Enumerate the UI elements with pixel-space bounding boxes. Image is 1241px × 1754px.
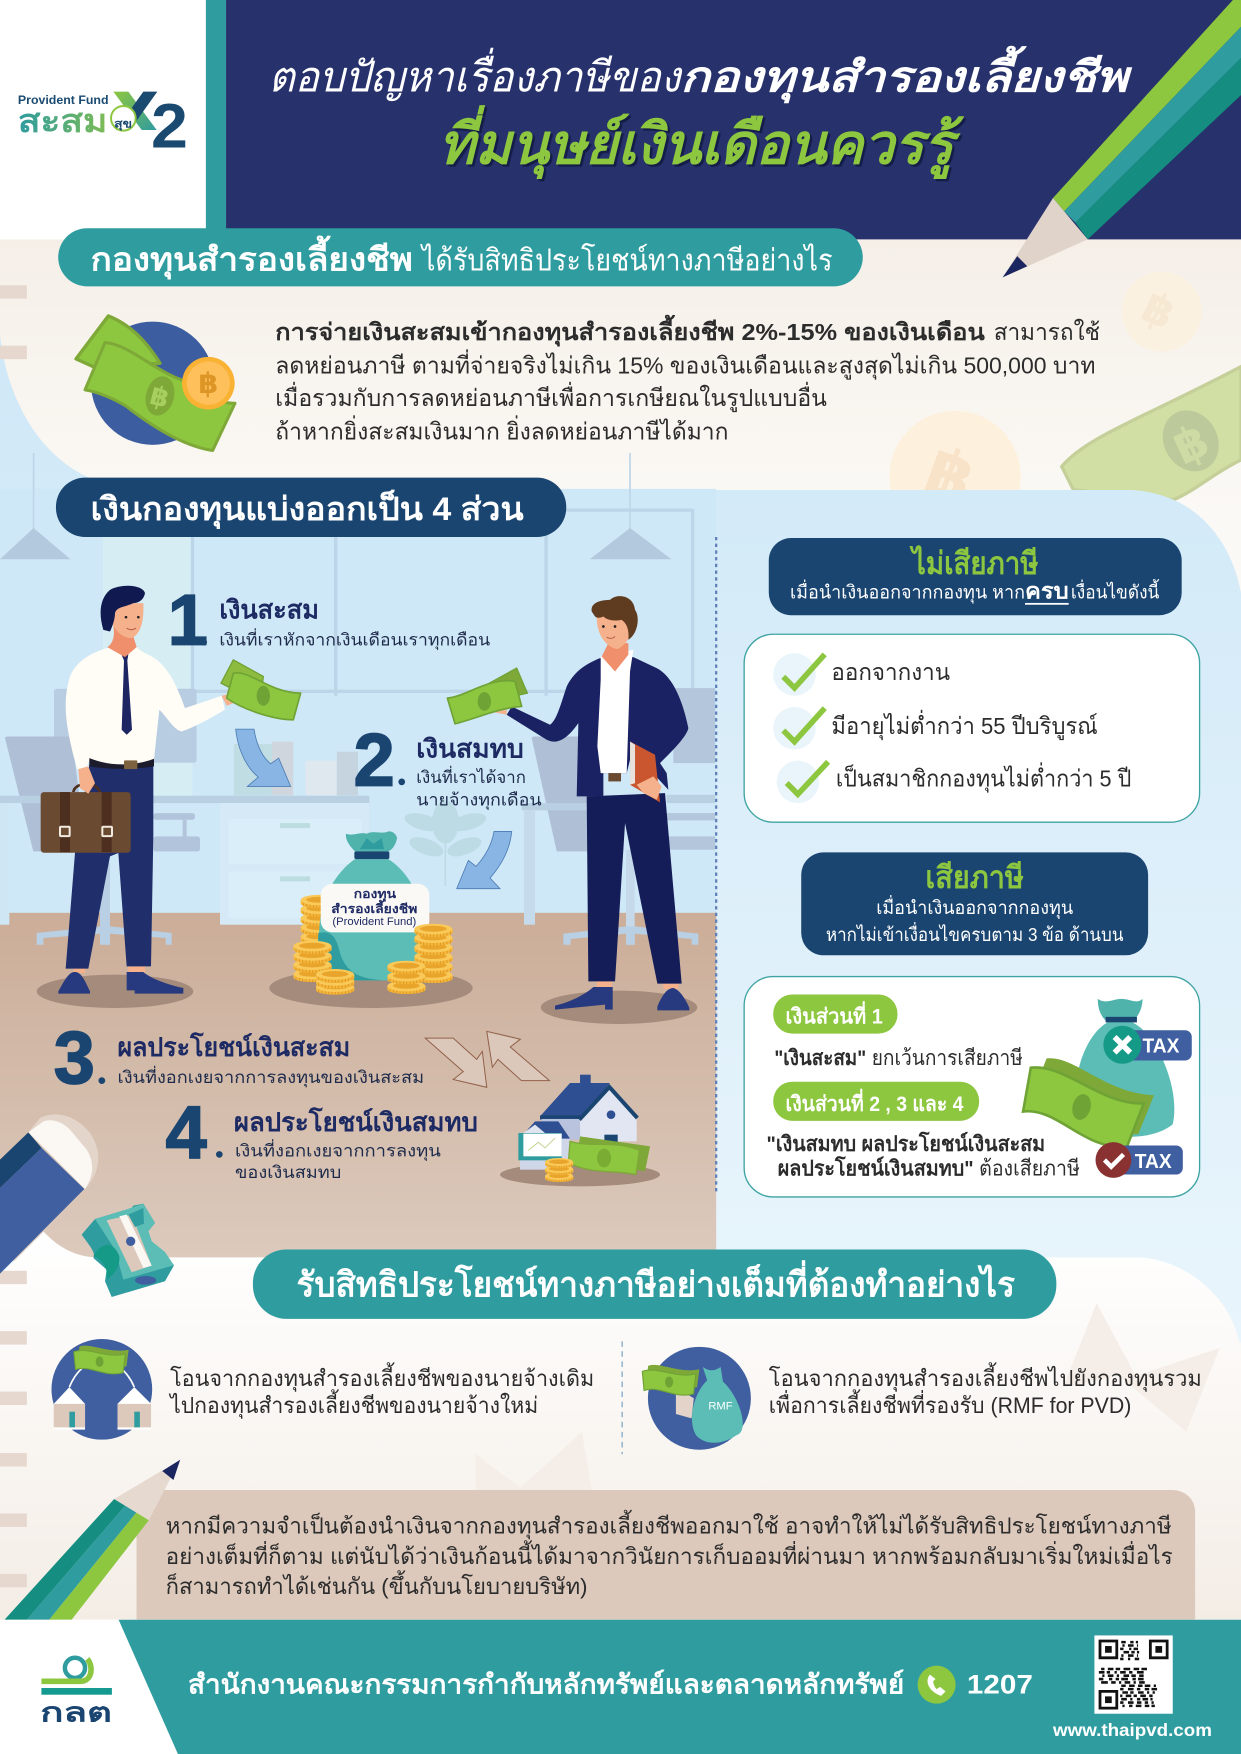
title: ที่มนุษย์เงินเดือนควรรู้ [439, 104, 964, 179]
check 2 [773, 707, 825, 749]
icon: money bag with coins: (Provident Fund) [332, 916, 417, 928]
panel: note: อย่างเต็มที่ก็ตาม แต่นับได้ว่าเงินก้อนนี้ได้มาจากวินัยการเก็บออมที่ผ่านมา หากพร้อมกลับมาเริ่มใหม่เมื่อไร [166, 1540, 1173, 1569]
icon: pencil bottom left [4, 1460, 180, 1620]
check 1 [773, 653, 825, 696]
text block: transfer to new employer: ไปกองทุนสำรองเลี้ยงชีพของนายจ้างใหม่ [168, 1389, 538, 1419]
item 3: savings returns: 3 [54, 1016, 95, 1099]
background: faded coins and bill [889, 272, 1241, 542]
dotted divider [715, 537, 717, 1195]
logo: SEC: กลต [40, 1698, 112, 1728]
footer: hotline: 1207 [967, 1670, 1033, 1700]
footer: office name: สำนักงานคณะกรรมการกำกับหลักทรัพย์และตลาดหลักทรัพย์ [188, 1670, 904, 1700]
item 3: savings returns [54, 1016, 424, 1099]
item 3: savings returns: ผลประโยชน์เงินสะสม [117, 1032, 350, 1062]
card: no tax heading: ครบ [1025, 578, 1069, 603]
card: taxable heading: เสียภาษี [925, 860, 1024, 895]
item 2: employer contribution: 2 [354, 718, 395, 801]
text block: tax benefit description [275, 314, 1100, 445]
pill: parts 2 3 4: เงินส่วนที่ 2 , 3 และ 4 [786, 1088, 964, 1116]
pill: part 1: เงินส่วนที่ 1 [786, 1001, 883, 1029]
item 1: savings [168, 580, 491, 660]
item 1: savings: 1 [168, 580, 208, 660]
item 1: savings: เงินที่เราหักจากเงินเดือนเราทุกเดือน [219, 627, 491, 650]
card: taxable heading [801, 852, 1148, 955]
icon: money and coin: ฿ [198, 368, 218, 400]
icon: tax bag and badges: TAX [1143, 1036, 1180, 1058]
card: no tax conditions [744, 634, 1200, 822]
background: faint triangles [476, 1303, 1220, 1499]
item 2: employer contribution: เงินที่เราได้จาก [416, 765, 526, 787]
background: faded coins and bill: ฿ [915, 433, 984, 519]
text block: transfer to new employer: โอนจากกองทุนสำรองเลี้ยงชีพของนายจ้างเดิม [170, 1362, 594, 1392]
arrow: blue down right [236, 729, 291, 786]
icon: money bag with coins: กองทุน [354, 887, 397, 902]
item 4: employer contribution returns: ของเงินสมทบ [235, 1163, 341, 1182]
text block: tax benefit description: เมื่อรวมกับการลดหย่อนภาษีเพื่อการเกษียณในรูปแบบอื่น [275, 381, 827, 413]
title: ตอบปัญหาเรื่องภาษีของ [269, 48, 683, 102]
text block: transfer to RMF [769, 1362, 1202, 1418]
figure: man with briefcase [37, 586, 301, 1008]
item 2: employer contribution [354, 718, 542, 810]
item 2: employer contribution: นายจ้างทุกเดือน [416, 790, 542, 810]
logo: Provident Fund x2: สะสม [18, 103, 107, 139]
card: no tax heading: เงื่อนไขดังนี้ [1071, 578, 1160, 602]
heading: tax benefits: ได้รับสิทธิประโยชน์ทางภาษีอย่างไร [420, 243, 833, 278]
background: faded coins and bill: ฿ [1165, 414, 1217, 474]
card: taxable conditions [744, 977, 1200, 1197]
item 1: savings: เงินสะสม [219, 597, 319, 625]
heading: tax benefits: กองทุนสำรองเลี้ยงชีพ [91, 236, 413, 281]
icon: money and coin [76, 316, 235, 451]
item 4: employer contribution returns: 4 [166, 1091, 207, 1174]
heading: four parts [56, 478, 566, 537]
card: no tax heading [769, 538, 1182, 615]
title: กองทุนสำรองเลี้ยงชีพ [680, 46, 1133, 104]
header band [0, 0, 1241, 239]
card: taxable conditions: ยกเว้นการเสียภาษี [872, 1046, 1023, 1070]
background: faded coins and bill: ฿ [1135, 283, 1182, 339]
icon: RMF bag: RMF [708, 1400, 733, 1412]
text block: transfer to new employer [168, 1362, 594, 1419]
text block: tax benefit description: สามารถใช้ [994, 319, 1100, 345]
logo: Provident Fund x2 [18, 92, 188, 162]
item 4: employer contribution returns: เงินที่งอกเงยจากการลงทุน [235, 1139, 441, 1162]
icon: RMF bag [642, 1347, 751, 1450]
arrow: blue down left [457, 831, 512, 889]
item 3: savings returns: เงินที่งอกเงยจากการลงทุนของเงินสะสม [117, 1065, 424, 1088]
icon: house with money [500, 1075, 660, 1186]
footer [0, 1620, 1241, 1754]
pill: part 1 [773, 994, 897, 1034]
text block: tax benefit description: การจ่ายเงินสะสมเข้ากองทุนสำรองเลี้ยงชีพ 2%-15% ของเงินเดือน [275, 314, 985, 347]
panel: lower white section [0, 1232, 1241, 1620]
heading: how to get full benefits [253, 1250, 1056, 1319]
card: no tax heading: เมื่อนำเงินออกจากกองทุน หาก [790, 579, 1025, 604]
text block: transfer to RMF: เพื่อการเลี้ยงชีพที่รองรับ (RMF for PVD) [769, 1389, 1131, 1418]
card: no tax conditions: มีอายุไม่ต่ำกว่า 55 ปีบริบูรณ์ [831, 709, 1098, 741]
card: taxable conditions: ต้องเสียภาษี [979, 1157, 1080, 1181]
icon: money bag with coins: สำรองเลี้ยงชีพ [331, 899, 417, 916]
icon: pencil top right [1003, 0, 1241, 277]
icon: money and coin: ฿ [147, 380, 173, 414]
item 2: employer contribution: เงินสมทบ [416, 735, 524, 763]
panel: note [137, 1490, 1195, 1620]
heading: four parts: เงินกองทุนแบ่งออกเป็น 4 ส่วน [91, 489, 524, 530]
logo: Provident Fund x2: สุข [114, 119, 132, 132]
figure: man in suit [447, 596, 697, 1024]
icon: tax bag and badges: TAX [1135, 1151, 1172, 1173]
logo: SEC [40, 1658, 112, 1728]
pill: parts 2 3 4 [773, 1082, 979, 1121]
text block: tax benefit description: ลดหย่อนภาษี ตามที่จ่ายจริงไม่เกิน 15% ของเงินเดือนและสูงสุดไม่เกิน 500,000 บาท [275, 349, 1096, 381]
office floor [0, 913, 716, 1261]
item 4: employer contribution returns [166, 1091, 478, 1182]
dashed divider [621, 1341, 623, 1454]
office furniture left [0, 689, 369, 945]
icon: QR code [1094, 1635, 1173, 1714]
icon: transfer between employers [51, 1339, 152, 1440]
check 3 [777, 761, 828, 803]
card: no tax conditions: ออกจากงาน [831, 659, 950, 685]
card: taxable heading: หากไม่เข้าเงื่อนไขครบตาม 3 ข้อ ด้านบน [826, 922, 1124, 945]
footer: website: www.thaipvd.com [1052, 1720, 1212, 1740]
item 4: employer contribution returns: ผลประโยชน์เงินสมทบ [234, 1107, 478, 1137]
card: taxable heading: เมื่อนำเงินออกจากกองทุน [876, 895, 1074, 920]
office furniture right [522, 688, 715, 945]
panel: note: ก็สามารถทำได้เช่นกัน (ขึ้นกับนโยบายบริษัท) [166, 1570, 587, 1599]
logo: Provident Fund x2: 2 [151, 92, 188, 162]
arrow: exchange arrows [425, 1031, 549, 1087]
logo: Provident Fund x2: Provident Fund [18, 93, 109, 107]
icon: money bag with coins [269, 831, 473, 1008]
office scene background [0, 453, 716, 920]
ruler tabs [0, 285, 27, 1587]
text block: tax benefit description: ถ้าหากยิ่งสะสมเงินมาก ยิ่งลดหย่อนภาษีได้มาก [275, 415, 728, 445]
heading: how to get full benefits: รับสิทธิประโยชน์ทางภาษีอย่างเต็มที่ต้องทำอย่างไร [297, 1259, 1015, 1304]
card: no tax heading: ไม่เสียภาษี [909, 545, 1038, 581]
panel: light blue section [0, 336, 1241, 1342]
title [269, 46, 1133, 179]
card: taxable conditions: "เงินสมทบ ผลประโยชน์เงินสะสม [767, 1131, 1045, 1156]
icon: tax bag and badges [1017, 999, 1192, 1178]
panel: note: หากมีความจำเป็นต้องนำเงินจากกองทุนสำรองเลี้ยงชีพออกมาใช้ อาจทำให้ไม่ได้รับสิทธิประโยชน์ทางภาษี [166, 1510, 1172, 1540]
icon: phone [918, 1666, 956, 1704]
card: taxable conditions: "เงินสะสม" [774, 1046, 866, 1070]
icon: sharpener [82, 1204, 174, 1297]
icon: eraser end of pencil [0, 1114, 98, 1274]
card: taxable conditions: ผลประโยชน์เงินสมทบ" [778, 1156, 974, 1181]
text block: transfer to RMF: โอนจากกองทุนสำรองเลี้ยงชีพไปยังกองทุนรวม [769, 1362, 1202, 1392]
heading: tax benefits [58, 228, 863, 286]
card: no tax conditions: เป็นสมาชิกกองทุนไม่ต่ำกว่า 5 ปี [836, 761, 1131, 792]
